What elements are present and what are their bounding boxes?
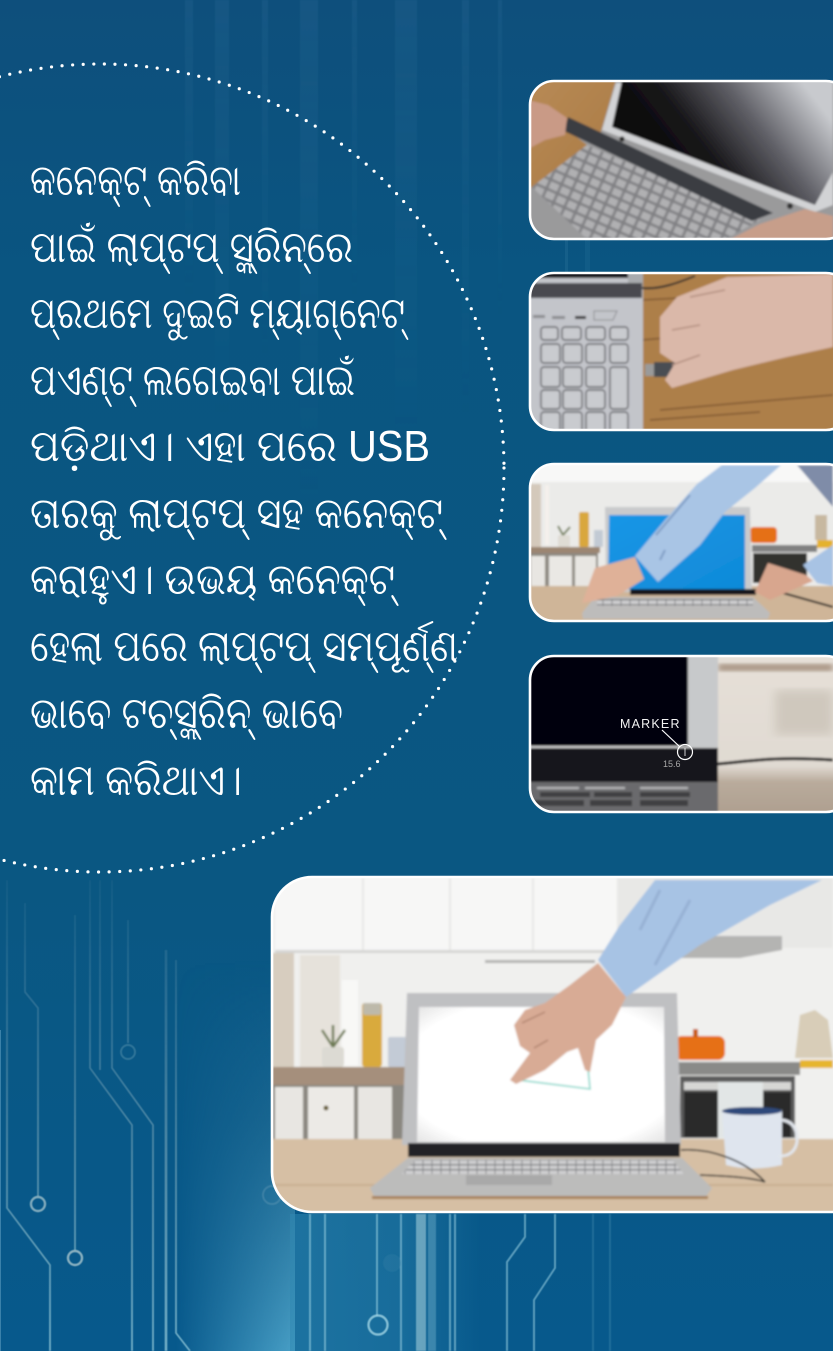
photo panel: plugging in USB <box>528 272 833 434</box>
photo panel: laptop in touchscreen use <box>270 875 833 1215</box>
body text: ହେଲା ପରେ ଲାପ୍‌ଟପ୍ ସମ୍ପୂର୍ଣ୍ଣ <box>30 621 458 673</box>
body text: ପଡ଼ିଥାଏ। ଏହା ପରେ USB <box>30 422 430 471</box>
body text: କରାହୁଏ। ଉଭୟ କନେକ୍ଟ୍ <box>30 555 399 606</box>
body text: ପ୍ରଥମେ ଦୁଇଟି ମ୍ୟାଗ୍‌ନେଟ୍ <box>30 289 409 340</box>
body text <box>30 156 458 805</box>
marker pointer <box>662 730 692 760</box>
marker label: MARKER <box>620 717 681 731</box>
body text: ଭାବେ ଟଚ୍‌ସ୍କ୍ରିନ୍ ଭାବେ <box>30 689 343 740</box>
body text: ପଏଣ୍ଟ୍ ଲଗେଇବା ପାଇଁ <box>30 355 355 407</box>
photo panel: attaching the magnetic bar <box>528 80 833 242</box>
photo panel: fitting the bar on laptop <box>528 462 833 624</box>
body text: ପାଇଁ ଲାପ୍‌ଟପ୍ ସ୍କ୍ରିନ୍‌ରେ <box>30 222 353 274</box>
circuit traces <box>7 880 610 1351</box>
body text: କାମ କରିଥାଏ। <box>30 756 242 805</box>
body text: କନେକ୍ଟ୍ କରିବା <box>30 156 241 207</box>
size label: 15.6 <box>663 759 681 769</box>
body text: ତାରକୁ ଲାପ୍‌ଟପ୍ ସହ କନେକ୍ଟ୍ <box>30 489 447 540</box>
photo panel: marker close-up <box>528 654 833 814</box>
dotted circle <box>0 64 504 872</box>
